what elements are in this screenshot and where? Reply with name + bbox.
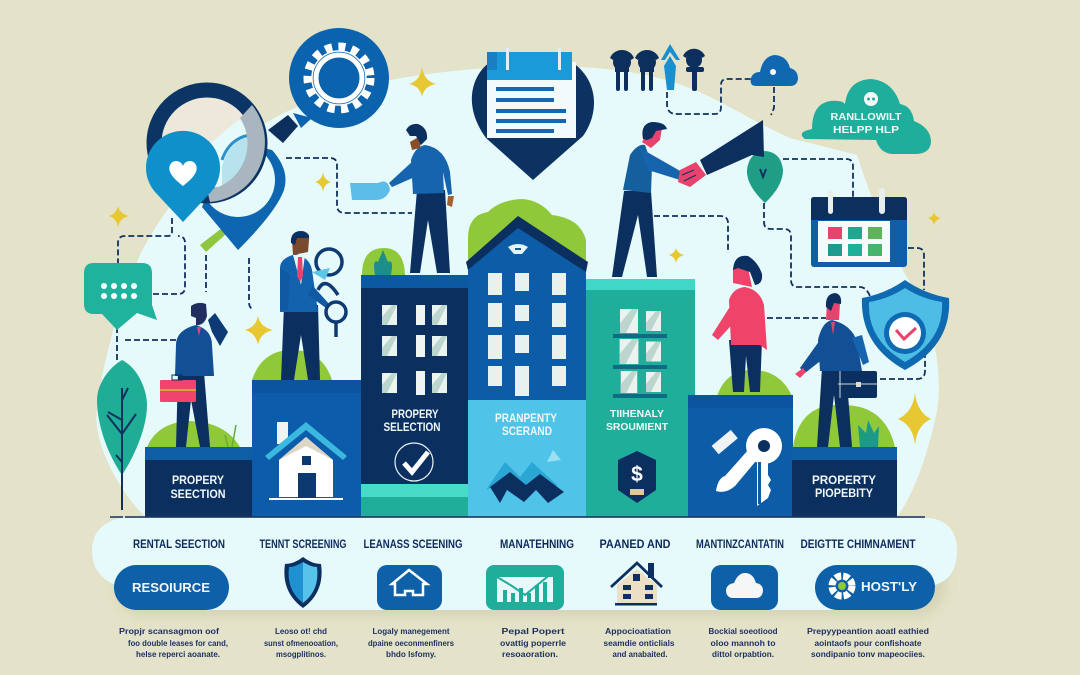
heading row: TENNT SCREENING: [260, 539, 347, 551]
icon: beige house: [611, 563, 662, 606]
building: block 6 with key: [688, 395, 793, 517]
description text row: and anabaited.: [612, 649, 668, 659]
icon: dollar badge: $: [631, 463, 643, 486]
person: man with briefcase: [795, 293, 877, 447]
description text row: aointaofs pour confishoate: [814, 638, 922, 648]
label: property selection: [384, 409, 440, 434]
building: block 7: [792, 447, 897, 517]
heading row: MANTINZCANTATIN: [696, 539, 784, 551]
label: property property: [812, 475, 876, 500]
resource pill: RESOIURCE: [132, 580, 210, 595]
label: property property: PROPERTY: [812, 475, 876, 487]
icon: security shield: [862, 280, 949, 370]
icon: people group: [610, 44, 705, 91]
green hills and plants: [147, 199, 895, 447]
building: teal tower: [586, 279, 695, 517]
label: tiihenaly sroumient: TIIHENALY: [610, 408, 664, 420]
icon: house tile: [377, 565, 442, 610]
description text row: Leoso ot! chd: [275, 626, 327, 636]
hostly pill: [815, 565, 935, 610]
icon: cloud tile: [711, 565, 778, 610]
icon: heart location pin: [146, 131, 220, 222]
heading row: RENTAL SEECTION: [133, 539, 225, 551]
icon: growth chart tile: [486, 565, 564, 610]
description text row: seamdie onticlials: [604, 638, 675, 648]
label: tiihenaly sroumient: SROUMIENT: [606, 421, 669, 433]
heading row: DEIGTTE CHIMNAMENT: [800, 539, 916, 551]
person: woman in pink: [712, 256, 767, 392]
person: man on phone with red briefcase: [160, 303, 228, 447]
description text row: Logaly manegement: [372, 626, 450, 636]
icon: blue location pin: [200, 140, 286, 252]
bottom panel: [92, 517, 957, 616]
description text row: [119, 626, 929, 659]
description text row: ovattig poperrle: [500, 638, 566, 648]
label: tiihenaly sroumient: [606, 408, 669, 433]
icon: gear magnifier: [268, 28, 389, 143]
icon: chevron mountains: [486, 450, 564, 503]
heading row: MANATEHNING: [500, 539, 574, 551]
description text row: Bockial soeotiood: [708, 626, 778, 636]
description text row: helse reperci aoanate.: [136, 649, 220, 659]
label: pranpenty scerand: SCERAND: [502, 426, 552, 438]
icon: dollar badge: [618, 451, 656, 503]
background blob: [96, 66, 939, 517]
description text row: oloo mannoh to: [710, 638, 776, 648]
label: pranpenty scerand: PRANPENTY: [495, 413, 557, 425]
icon: tree: [97, 360, 147, 510]
label: property section: PROPERY: [172, 473, 224, 487]
cloud label: RANLLOWILT: [830, 111, 902, 123]
description text row: dittol orpabtion.: [712, 649, 774, 659]
icon: small blue cloud: [751, 55, 798, 86]
description text row: msogplitinos.: [276, 649, 326, 659]
icon: calendar: [811, 188, 907, 267]
decorative stars: [109, 67, 941, 445]
building: block 3 dark tower: [361, 275, 469, 517]
description text row: Pepal Popert: [502, 626, 565, 636]
icon: green pin: [747, 151, 783, 203]
icon: check badge: [395, 443, 433, 481]
description text row: resoaoration.: [502, 649, 558, 659]
description text row: sunst ofmenooation,: [264, 638, 338, 648]
person: man shaking hands: [612, 120, 764, 277]
label: property section: SEECTION: [170, 487, 226, 501]
heading row: PAANED AND: [600, 539, 670, 551]
resource pill: [114, 565, 229, 610]
building: central tower with roof: [466, 216, 588, 517]
icon: notepad location pin: [472, 48, 594, 180]
label: pranpenty scerand: [495, 413, 557, 438]
cloud label: HELPP HLP: [833, 124, 899, 136]
person: woman reaching with glove: [350, 124, 454, 273]
icon: chat bubble: [84, 263, 157, 330]
description text row: Propjr scansagmon oof: [119, 626, 219, 636]
description text row: Appocioatiation: [605, 626, 671, 636]
icon: green help cloud: [802, 79, 931, 154]
label: property section: [170, 473, 226, 501]
icon: large magnifying glass: [154, 90, 265, 202]
label: property selection: SELECTION: [384, 420, 440, 434]
description text row: dpaine oeconmenfiners: [368, 638, 454, 648]
building: block 2 with house: [252, 380, 362, 517]
description text row: Prepyypeantion aoatl eathied: [807, 626, 929, 636]
description text row: foo double leases for cand,: [128, 638, 228, 648]
person: man with keys: [280, 231, 346, 380]
icon: small shield: [284, 557, 322, 608]
cloud label: [830, 111, 902, 136]
heading row: [133, 539, 916, 551]
label: property selection: PROPERY: [392, 409, 439, 421]
hostly pill: HOST'LY: [861, 579, 917, 594]
label: property property: PIOPEBITY: [815, 488, 873, 500]
description text row: sondipanio tonv mapeociies.: [811, 649, 925, 659]
heading row: LEANASS SCEENING: [364, 539, 463, 551]
dashed connector lines: [117, 79, 925, 379]
description text row: bhdo lsfomy.: [386, 649, 436, 659]
building: block 1: [145, 447, 253, 517]
